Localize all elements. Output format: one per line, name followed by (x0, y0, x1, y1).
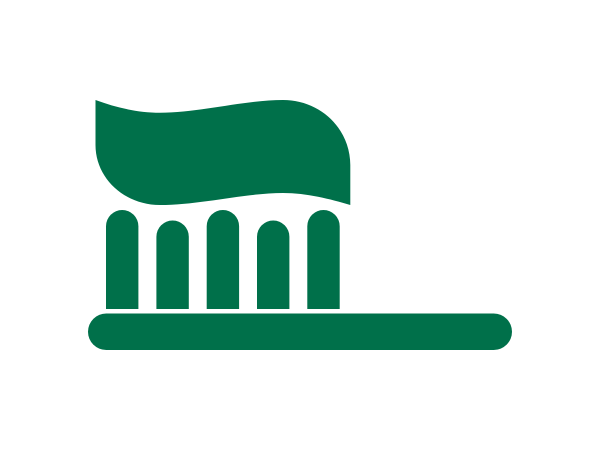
bristle 3 (207, 210, 239, 309)
bristle 2 (156, 220, 189, 309)
bristle 5 (307, 210, 340, 309)
brush handle (88, 314, 512, 350)
bristle 1 (106, 210, 138, 309)
toothpaste (96, 100, 350, 205)
bristles (106, 210, 340, 309)
bristle 4 (257, 220, 289, 309)
